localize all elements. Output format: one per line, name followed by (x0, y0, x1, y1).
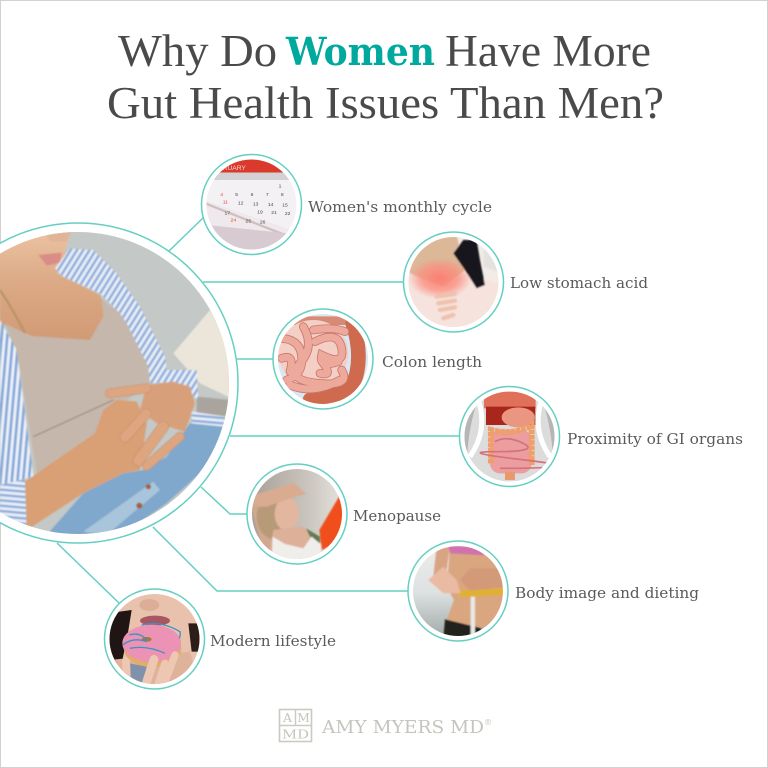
icon: calendar photo: 4 (220, 192, 223, 198)
icon: calendar photo: 17 (225, 210, 230, 216)
icon: calendar photo: RUARY (223, 165, 246, 172)
panel: main photo of woman holding stomach (0, 223, 240, 543)
panel: colon length (273, 309, 482, 409)
label: Body image and dieting (515, 584, 699, 602)
icon: calendar photo: 12 (238, 200, 244, 206)
panel: women's monthly cycle (200, 154, 492, 255)
panel: proximity of GI organs (460, 386, 743, 486)
icon: waist measuring photo (410, 545, 506, 638)
title (107, 26, 664, 128)
icon: calendar photo: 14 (268, 202, 274, 208)
logo mark (280, 710, 312, 742)
logo (280, 710, 492, 742)
icon: calendar photo: 6 (251, 192, 254, 198)
icon: calendar photo: 19 (257, 209, 263, 215)
title: Gut Health Issues Than Men? (107, 78, 664, 128)
ring (104, 589, 204, 689)
connector: monthly cycle (169, 217, 204, 251)
ring (408, 541, 508, 641)
icon: calendar photo: 22 (285, 211, 291, 217)
icon: woman eating donut photo (110, 594, 200, 684)
panel: low stomach acid (404, 232, 648, 332)
label: Low stomach acid (510, 274, 648, 292)
connector: body image (153, 527, 408, 591)
ring (273, 309, 373, 409)
panel: body image and dieting (408, 541, 699, 641)
connector: menopause (201, 487, 247, 514)
main ring (0, 223, 238, 543)
icon: torso organs illustration (464, 392, 554, 482)
logo mark: M (297, 710, 310, 725)
icon: calendar photo: 8 (281, 192, 284, 198)
logo mark: MD (282, 726, 309, 742)
icon: calendar photo: 26 (260, 219, 266, 225)
icon: calendar photo: 25 (246, 219, 251, 225)
title: Have More (445, 26, 651, 76)
label: Modern lifestyle (210, 632, 336, 650)
title: Why Do (118, 26, 277, 76)
main photo (0, 230, 240, 540)
icon: woman with fan photo (250, 467, 345, 562)
connector: GI organs (230, 435, 460, 437)
logo mark: A (282, 710, 293, 725)
icon: calendar photo: 13 (253, 202, 259, 208)
icon: calendar photo: 7 (266, 192, 269, 198)
panel: modern lifestyle (104, 589, 336, 689)
icon: calendar photo: 11 (223, 199, 228, 205)
ring (460, 386, 560, 486)
icon: calendar photo: 1 (279, 183, 282, 189)
icon: neck pain photo (408, 237, 498, 327)
connector: colon length (237, 358, 273, 360)
panel: menopause (247, 464, 441, 564)
connector: stomach acid (203, 281, 404, 283)
icon: intestines illustration (278, 314, 368, 404)
logo wordmark: AMY MYERS MD (321, 717, 484, 738)
icon: calendar photo: 5 (235, 192, 238, 198)
ring (247, 464, 347, 564)
connector: modern lifestyle (57, 543, 119, 603)
logo wordmark: ® (484, 718, 492, 727)
title: Women (285, 29, 435, 74)
label: Proximity of GI organs (567, 430, 743, 448)
ring (404, 232, 504, 332)
label: Women's monthly cycle (308, 198, 492, 216)
icon: calendar photo (206, 160, 296, 250)
icon: calendar photo: 24 (231, 218, 236, 224)
ring (202, 154, 302, 254)
label: Menopause (353, 507, 441, 525)
icon: calendar photo: 21 (271, 210, 277, 216)
icon: calendar photo: 15 (282, 203, 288, 209)
label: Colon length (382, 353, 482, 371)
